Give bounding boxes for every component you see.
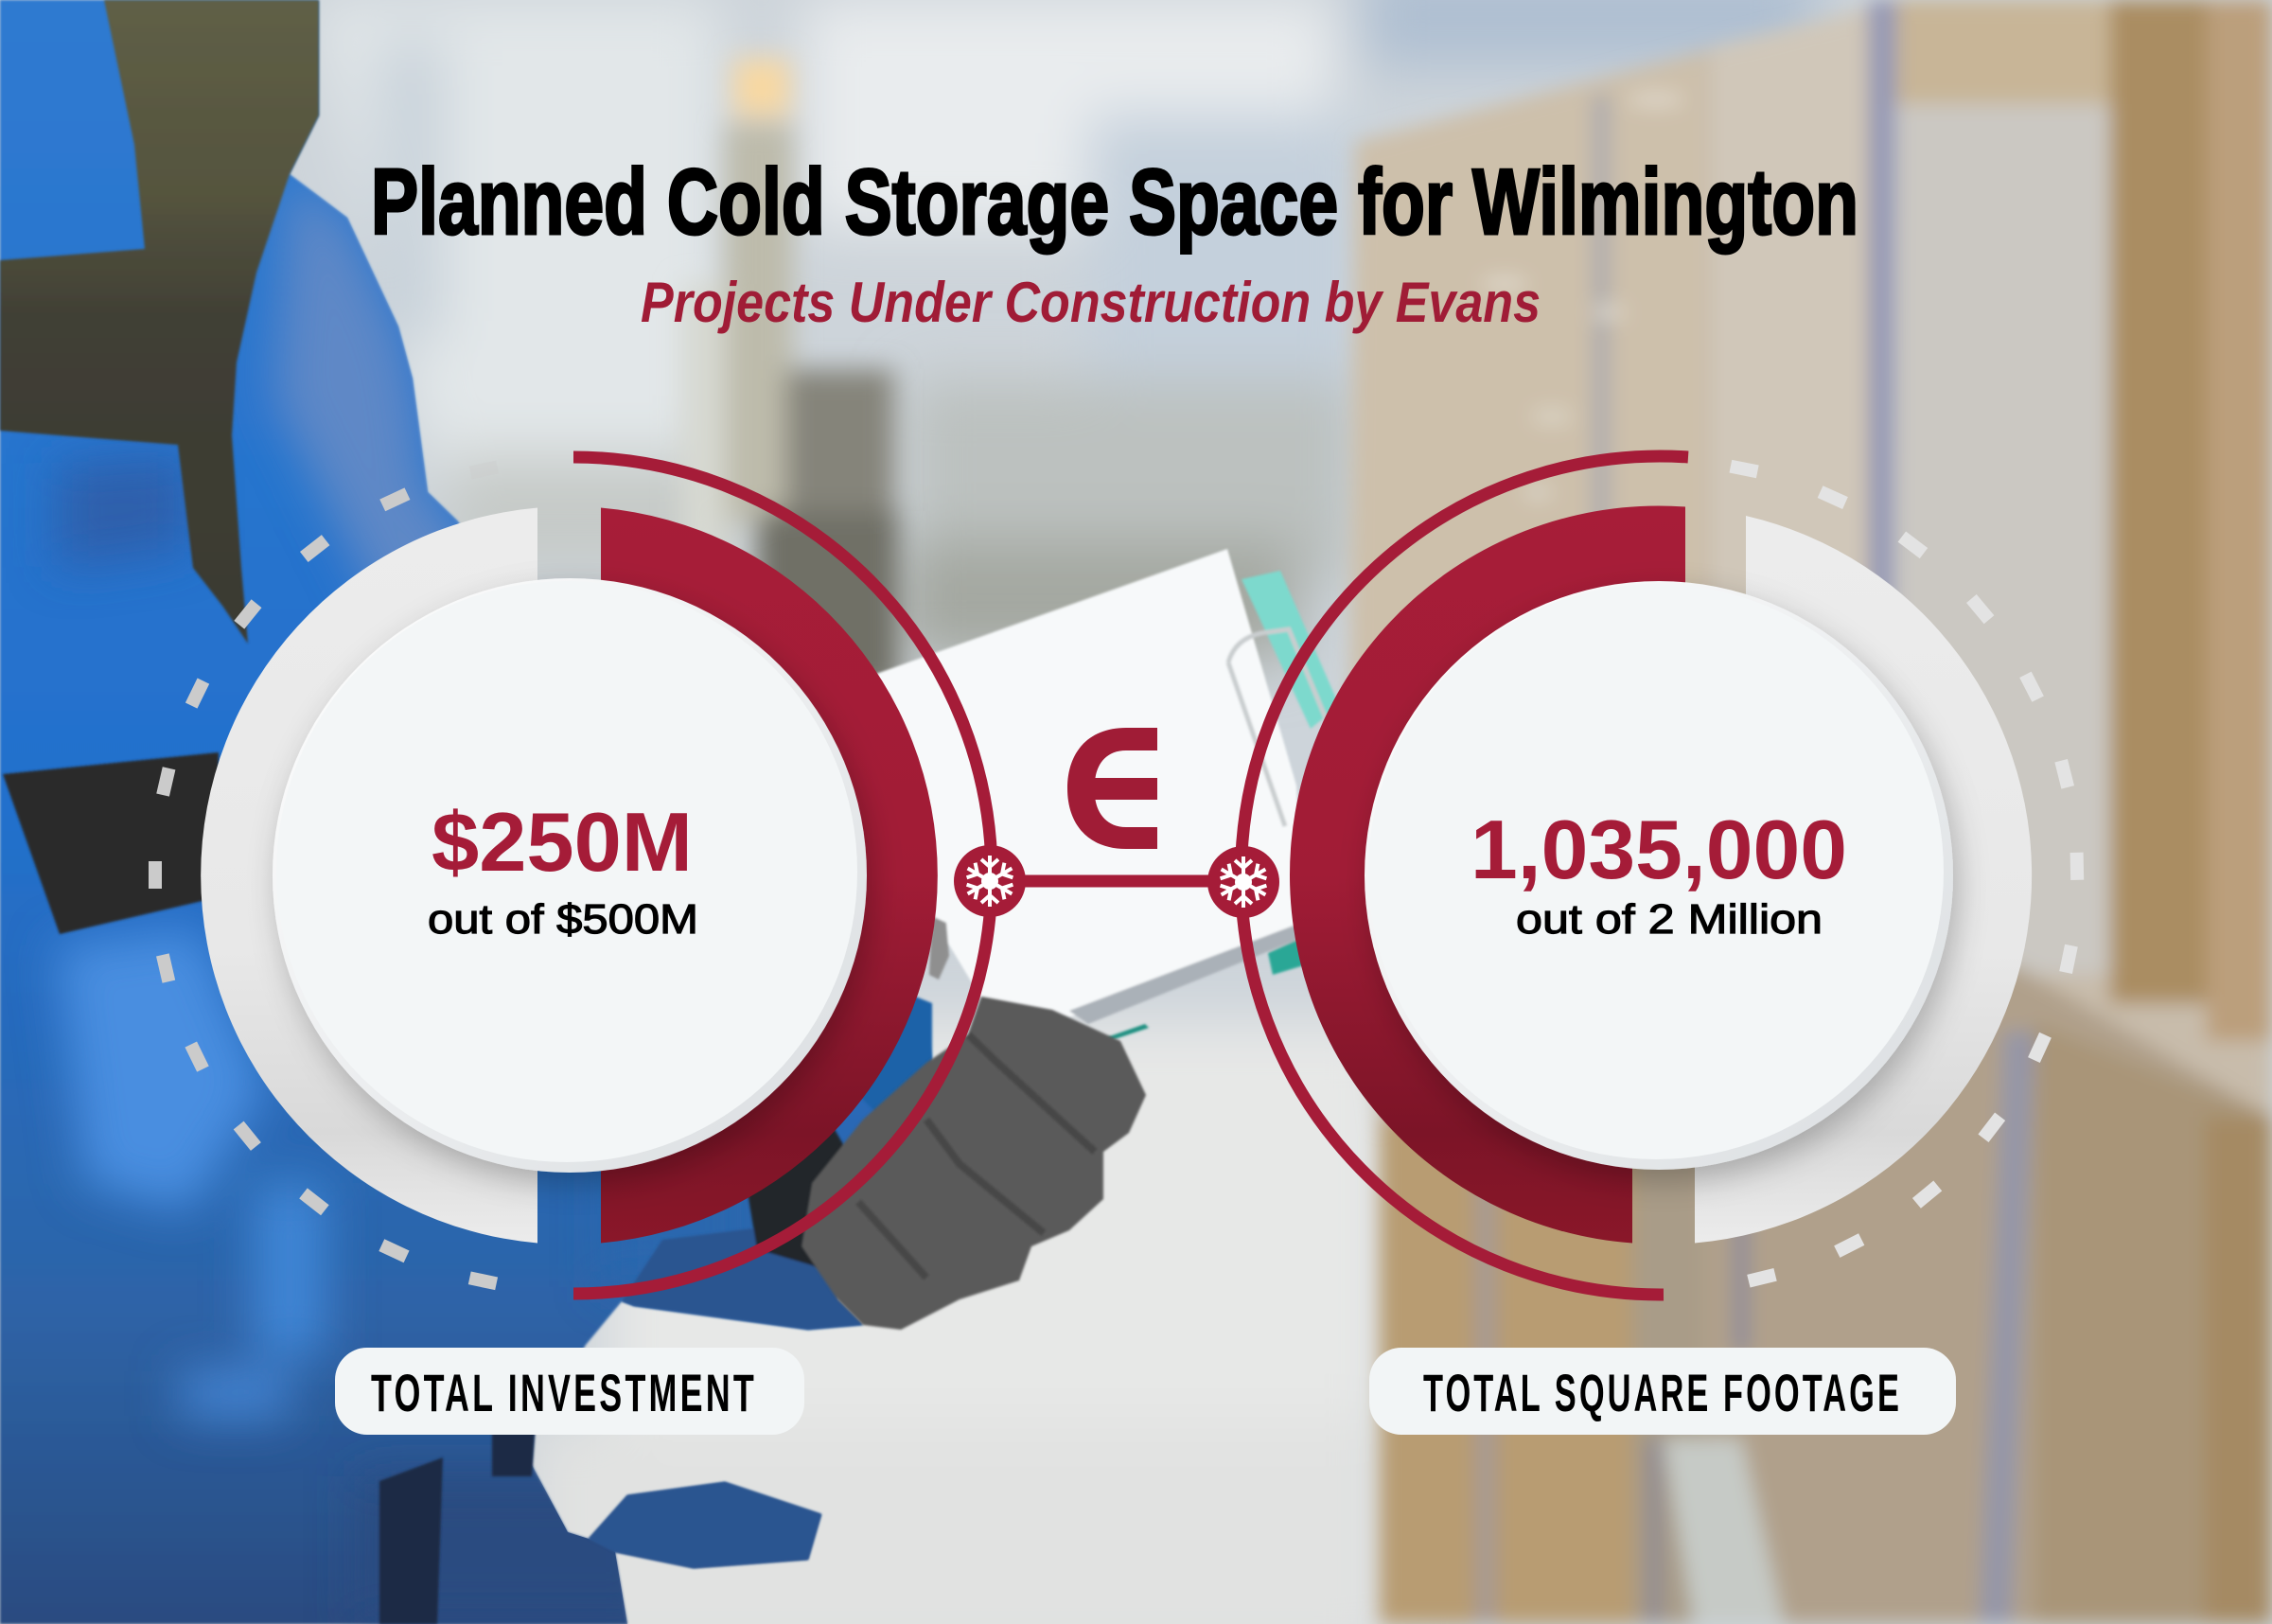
icon: snowflake node right (1207, 846, 1279, 918)
outer thin arc (1241, 456, 1688, 1295)
tick ring: right (1729, 460, 2084, 1287)
panel: total investment (149, 457, 992, 1294)
white centre disc (1365, 581, 1953, 1170)
label: total square footage (1369, 1348, 1956, 1435)
red ring segment (1290, 505, 1685, 1244)
value caption: out of $500M (428, 896, 698, 943)
title: Planned Cold Storage Space for Wilmington (371, 150, 1858, 254)
background: clipboard and paper (876, 549, 1339, 1041)
background: cardboard boxes (1348, 0, 2272, 1624)
background: knitted glove (801, 997, 1146, 1330)
value: $250M (432, 795, 693, 889)
tick ring: left (149, 461, 499, 1290)
outer thin arc (573, 457, 992, 1294)
grey ring segment (201, 507, 537, 1244)
jacket collar and strap (0, 0, 319, 644)
value caption: out of 2 Million (1516, 896, 1823, 943)
label: total investment: TOTAL INVESTMENT (371, 1363, 757, 1422)
red ring segment (601, 507, 938, 1244)
panel: total square footage (1241, 456, 2084, 1295)
grey ring segment (1695, 516, 2032, 1244)
icon: snowflake node left (954, 845, 1026, 917)
label: total investment (335, 1348, 804, 1435)
icon: Evans logo mark (1067, 728, 1157, 849)
white centre disc (273, 578, 867, 1173)
connector line (990, 874, 1243, 888)
value: 1,035,000 (1471, 803, 1847, 896)
label: total square footage: TOTAL SQUARE FOOTAGE (1423, 1363, 1902, 1422)
background: worker jacket (0, 0, 932, 1624)
subtitle: Projects Under Construction by Evans (641, 271, 1541, 334)
